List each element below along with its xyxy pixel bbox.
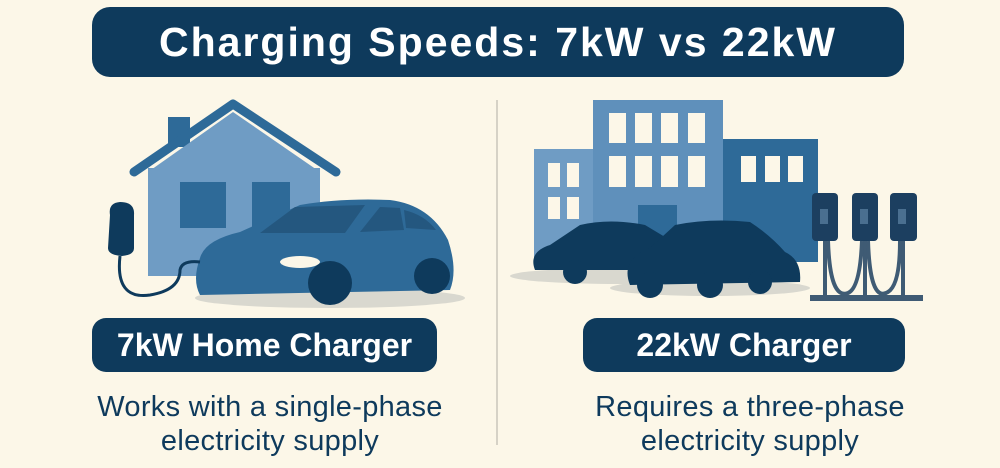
text: single-phase (97, 391, 443, 457)
icon: house (134, 104, 336, 276)
text: single-phase: Works with a single-phase (97, 391, 443, 423)
text: three-phase: Requires a three-phase (595, 391, 905, 423)
title: Charging Speeds: 7kW vs 22kW (159, 19, 837, 65)
text: single-phase: electricity supply (161, 425, 379, 457)
icon: buildings (534, 100, 818, 264)
icon: chargers (810, 193, 923, 301)
illustration: city buildings with chargers (510, 100, 923, 301)
illustration: house with car (108, 99, 465, 308)
label: 22kW Charger: 22kW Charger (636, 327, 852, 363)
icon: car (108, 200, 465, 308)
title (92, 7, 904, 77)
text: three-phase: electricity supply (641, 425, 859, 457)
label: 22kW Charger (583, 318, 905, 372)
text: three-phase (595, 391, 905, 457)
label: 7kW Home Charger (92, 318, 437, 372)
divider (496, 100, 498, 445)
label: 7kW Home Charger: 7kW Home Charger (117, 327, 412, 363)
icon: cars (510, 221, 810, 298)
